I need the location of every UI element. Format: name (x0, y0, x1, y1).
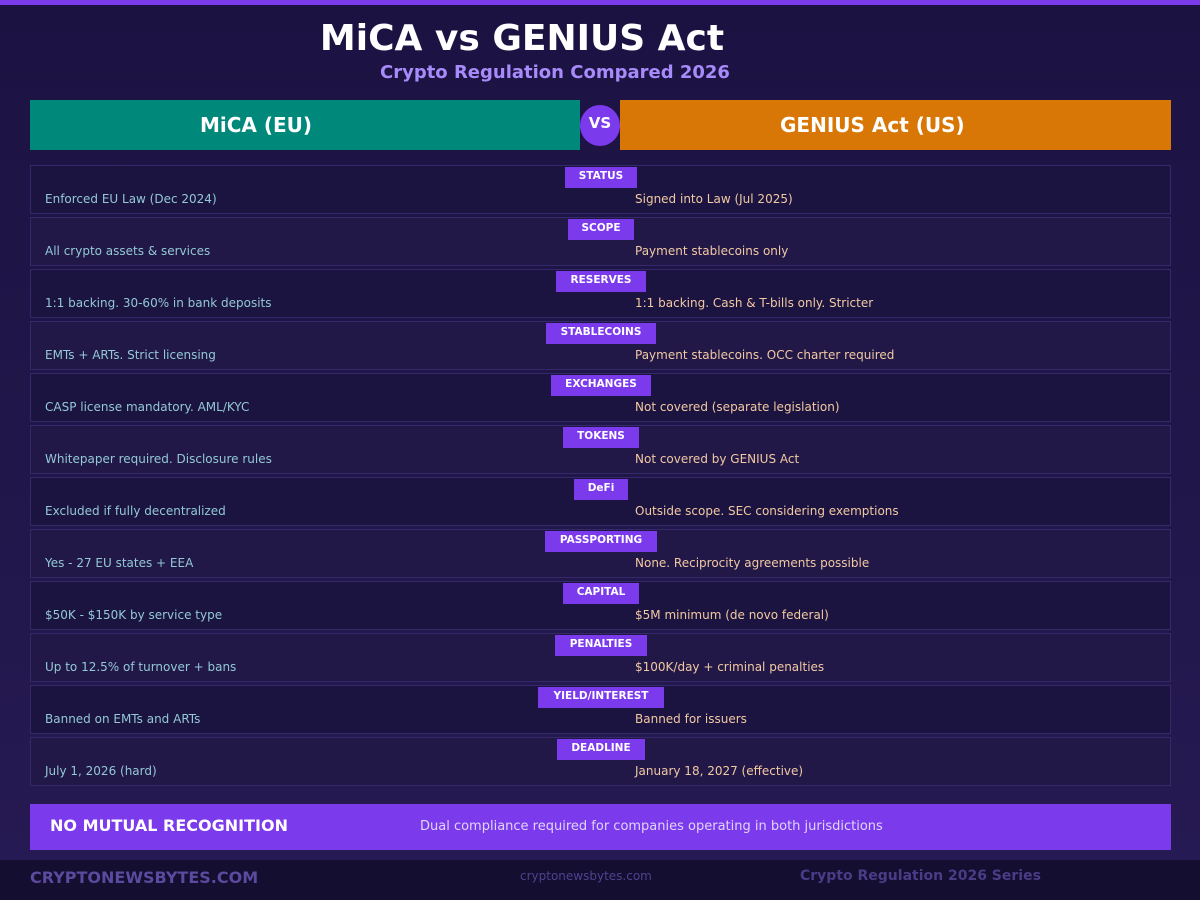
row: passporting: None. Reciprocity agreements possible (635, 556, 869, 570)
row: stablecoins: STABLECOINS (561, 326, 641, 338)
row: scope: SCOPE (581, 222, 621, 234)
row: scope: All crypto assets & services (45, 244, 210, 258)
footer: Crypto Regulation 2026 Series (800, 868, 1041, 884)
row: defi: DeFi (588, 482, 614, 494)
row: penalties: $100K/day + criminal penalties (635, 660, 824, 674)
row: reserves: RESERVES (571, 274, 631, 286)
row: tokens: TOKENS (577, 430, 625, 442)
row: yield: Banned on EMTs and ARTs (45, 712, 200, 726)
row: capital (30, 581, 1171, 630)
callout: no mutual recognition: NO MUTUAL RECOGNITION (50, 816, 288, 835)
callout: no mutual recognition (30, 804, 1171, 850)
row: yield: Banned for issuers (635, 712, 747, 726)
row: reserves: 1:1 backing. Cash & T-bills only. Stricter (635, 296, 873, 310)
row: passporting (30, 529, 1171, 578)
row: scope (30, 217, 1171, 266)
row: tokens: Whitepaper required. Disclosure rules (45, 452, 272, 466)
row: status (30, 165, 1171, 214)
row: exchanges: EXCHANGES (565, 378, 637, 390)
callout: no mutual recognition: Dual compliance required for companies operating in both jurisdictions (420, 819, 883, 834)
footer: CRYPTONEWSBYTES.COM (30, 868, 258, 887)
VS badge: VS (589, 114, 611, 132)
row: stablecoins: Payment stablecoins. OCC charter required (635, 348, 894, 362)
row: stablecoins (30, 321, 1171, 370)
row: status: Signed into Law (Jul 2025) (635, 192, 793, 206)
row: passporting: Yes - 27 EU states + EEA (45, 556, 193, 570)
header: GENIUS: GENIUS Act (US) (780, 113, 965, 137)
row: deadline: DEADLINE (571, 742, 631, 754)
row: defi (30, 477, 1171, 526)
row: tokens (30, 425, 1171, 474)
header: MiCA: MiCA (EU) (200, 113, 312, 137)
row: exchanges: Not covered (separate legislation) (635, 400, 840, 414)
row: penalties: Up to 12.5% of turnover + bans (45, 660, 236, 674)
row: capital: CAPITAL (577, 586, 625, 598)
row: status: Enforced EU Law (Dec 2024) (45, 192, 217, 206)
header: GENIUS (620, 100, 1171, 150)
footer (0, 860, 1200, 900)
row: deadline: July 1, 2026 (hard) (45, 764, 157, 778)
row: deadline: January 18, 2027 (effective) (635, 764, 803, 778)
footer: cryptonewsbytes.com (520, 869, 652, 883)
title: MiCA vs GENIUS Act (320, 18, 724, 59)
row: stablecoins: EMTs + ARTs. Strict licensing (45, 348, 216, 362)
row: capital: $50K - $150K by service type (45, 608, 222, 622)
VS badge (580, 105, 620, 146)
row: deadline (30, 737, 1171, 786)
row: reserves (30, 269, 1171, 318)
row: exchanges (30, 373, 1171, 422)
row: penalties: PENALTIES (570, 638, 632, 650)
row: status: STATUS (579, 170, 623, 182)
row: defi: Outside scope. SEC considering exemptions (635, 504, 899, 518)
row: penalties (30, 633, 1171, 682)
row: yield (30, 685, 1171, 734)
row: yield: YIELD/INTEREST (554, 690, 648, 702)
row: passporting: PASSPORTING (560, 534, 642, 546)
row: capital: $5M minimum (de novo federal) (635, 608, 829, 622)
row: scope: Payment stablecoins only (635, 244, 788, 258)
row: exchanges: CASP license mandatory. AML/KYC (45, 400, 249, 414)
row: defi: Excluded if fully decentralized (45, 504, 226, 518)
row: reserves: 1:1 backing. 30-60% in bank deposits (45, 296, 272, 310)
header: MiCA (30, 100, 580, 150)
subtitle: Crypto Regulation Compared 2026 (380, 62, 730, 83)
row: tokens: Not covered by GENIUS Act (635, 452, 799, 466)
